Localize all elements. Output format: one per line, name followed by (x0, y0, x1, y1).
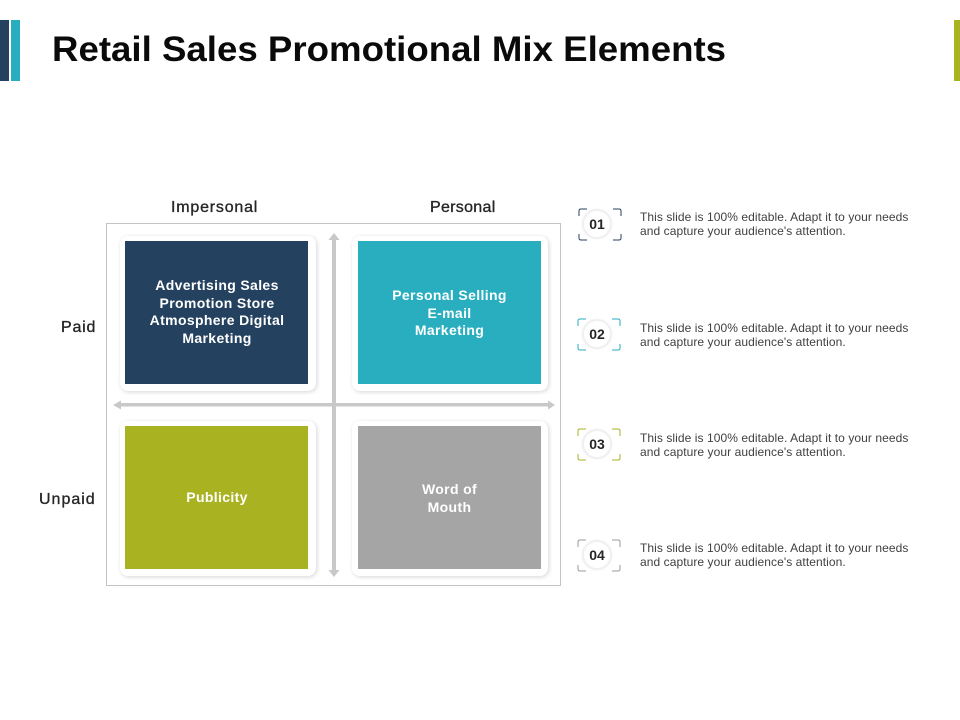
description 03: This slide is 100% editable. Adapt it to your needs (640, 431, 908, 445)
description 01: This slide is 100% editable. Adapt it to your needs (640, 210, 908, 224)
badge 01: 01 (589, 216, 605, 232)
panel: unpaid impersonal: Publicity (186, 489, 248, 505)
description 02: This slide is 100% editable. Adapt it to your needs (640, 321, 908, 335)
panel: unpaid personal (358, 426, 541, 569)
badge 04 (578, 540, 620, 572)
description 02 (640, 321, 908, 349)
accent bars: top left (0, 20, 20, 81)
badge 04: 04 (589, 547, 605, 563)
row label: Paid: Paid (61, 319, 96, 336)
panel: paid impersonal: Marketing (182, 330, 252, 346)
panel: unpaid personal: Word of (422, 481, 477, 497)
panel: paid personal (358, 241, 541, 384)
row label: Unpaid: Unpaid (39, 491, 96, 508)
panel: paid impersonal: Promotion Store (160, 294, 274, 310)
panel: paid impersonal: Atmosphere Digital (150, 312, 284, 328)
badge 02: 02 (589, 326, 605, 342)
panel: paid personal: E-mail (427, 305, 472, 321)
panel: paid impersonal: Advertising Sales (155, 277, 279, 293)
description 04: and capture your audience's attention. (640, 555, 846, 569)
description 01: and capture your audience's attention. (640, 224, 846, 238)
description 03 (640, 431, 908, 459)
description 01 (640, 210, 908, 238)
panel: paid personal: Marketing (415, 322, 484, 338)
panel: paid personal: Personal Selling (392, 287, 507, 303)
panel: unpaid impersonal card (120, 421, 316, 576)
panel: paid personal card (352, 236, 548, 391)
description 04 (640, 541, 908, 569)
panel: unpaid personal card (352, 421, 548, 576)
badge 01 (578, 208, 622, 240)
panel: paid impersonal (125, 241, 308, 384)
badge 03 (578, 428, 620, 460)
axis arrows (113, 233, 555, 577)
column label: Personal: Personal (430, 199, 496, 216)
badge 03: 03 (589, 436, 605, 452)
column label: Impersonal: Impersonal (171, 199, 258, 216)
badge 02 (578, 318, 620, 350)
matrix frame (106, 223, 561, 586)
panel: unpaid personal: Mouth (428, 498, 471, 514)
panel: paid impersonal card (120, 236, 316, 391)
description 03: and capture your audience's attention. (640, 445, 846, 459)
description 02: and capture your audience's attention. (640, 335, 846, 349)
description 04: This slide is 100% editable. Adapt it to your needs (640, 541, 908, 555)
accent bar: top right (954, 20, 960, 81)
panel: unpaid impersonal (125, 426, 308, 569)
title: Retail Sales Promotional Mix Elements (52, 30, 726, 69)
